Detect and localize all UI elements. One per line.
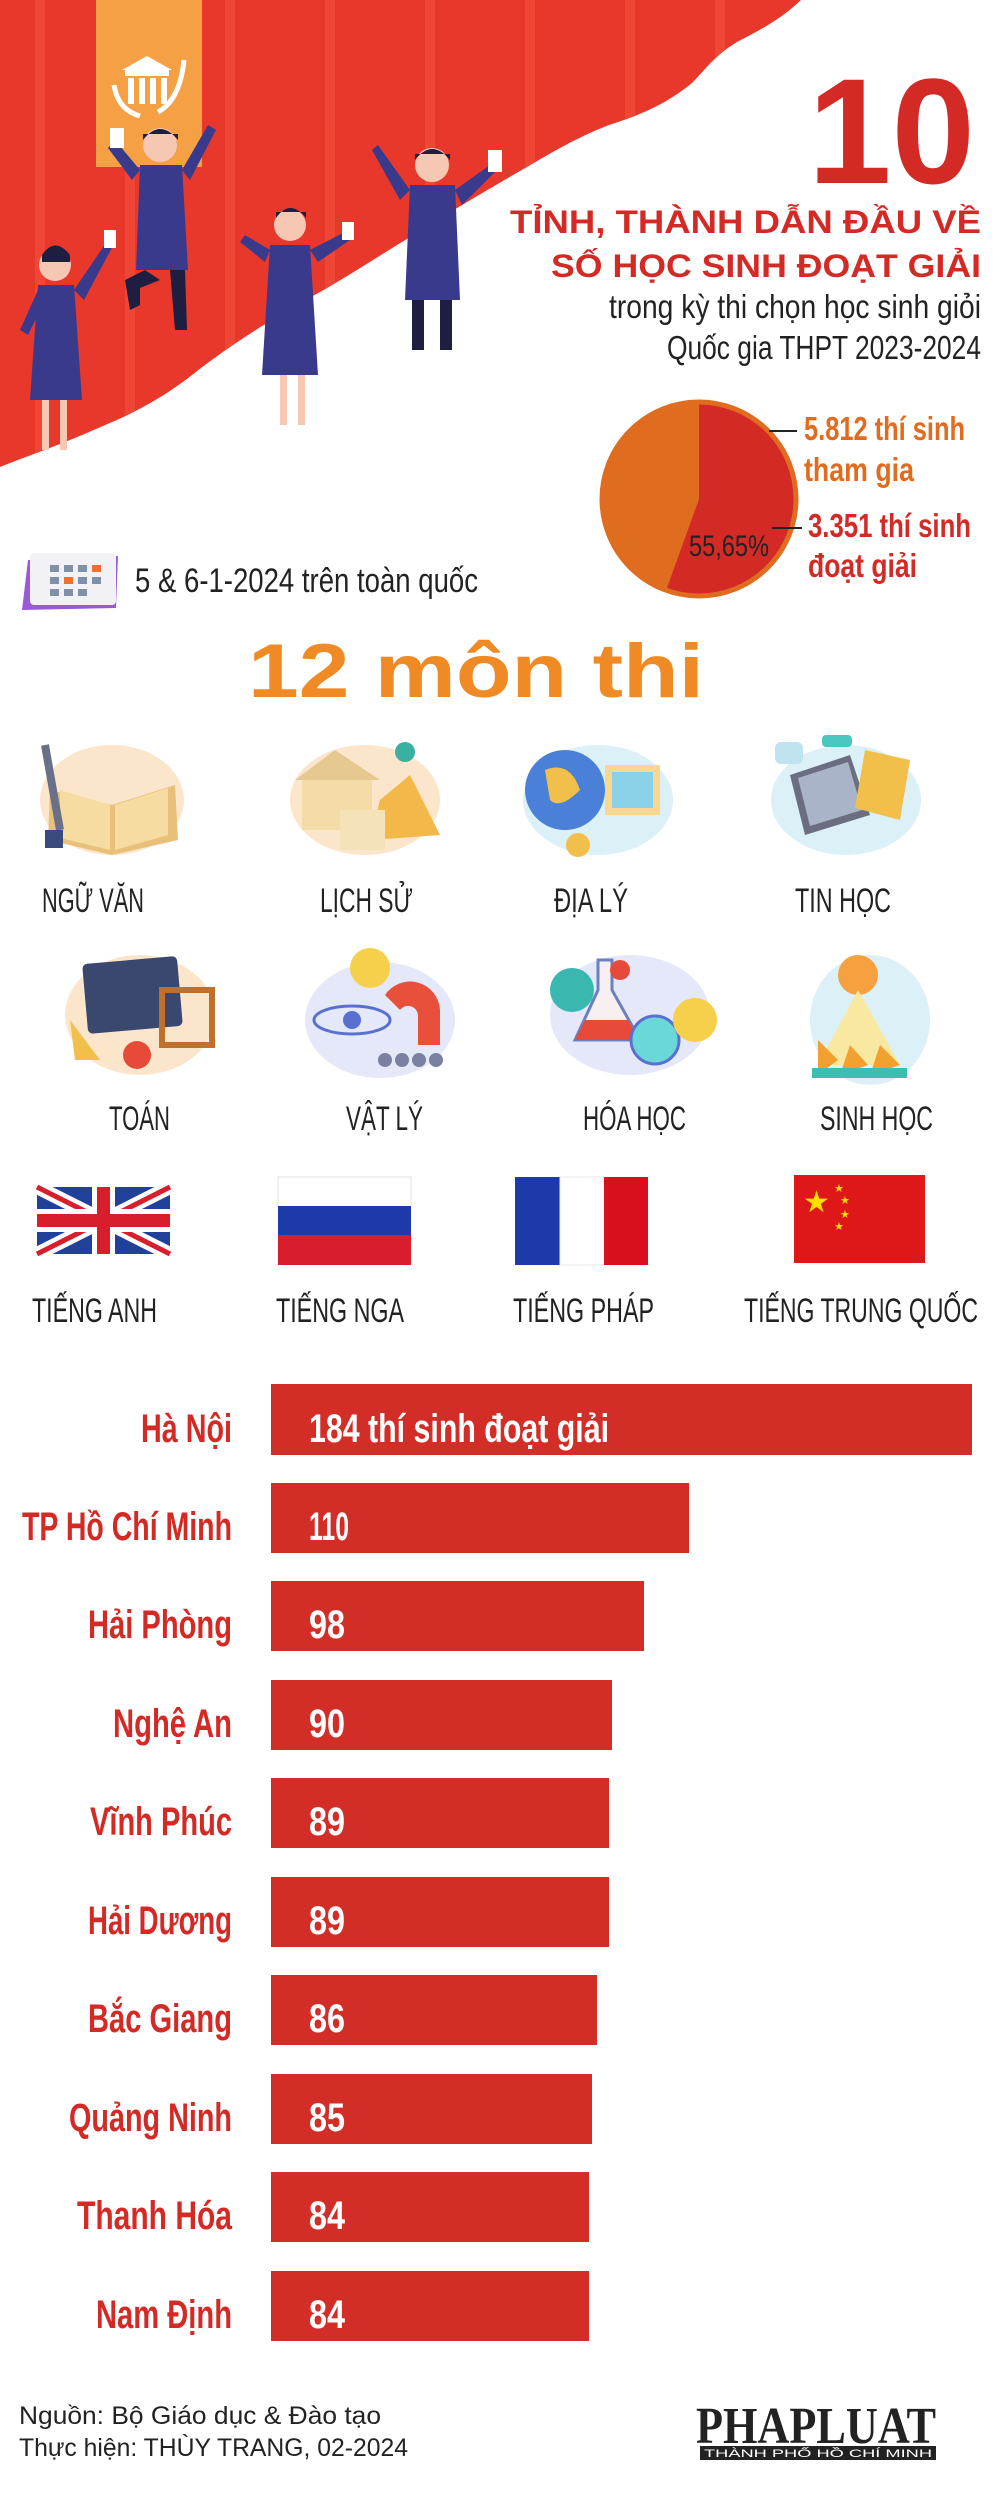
bar: Thanh Hóa <box>77 2172 589 2242</box>
subject labels row 1: ĐỊA LÝ <box>554 882 628 920</box>
logo: Pháp Luật: THÀNH PHỐ HỒ CHÍ MINH <box>704 2446 932 2460</box>
bar: Hải Phòng <box>88 1581 644 1651</box>
icon: geography <box>523 745 673 857</box>
source credits <box>19 2402 408 2462</box>
bar: Nghệ An: Nghệ An <box>113 1702 232 1746</box>
title: SỐ HỌC SINH ĐOẠT GIẢI <box>551 248 981 284</box>
bar: TP Hồ Chí Minh: 110 <box>309 1505 349 1549</box>
subject labels row 2: SINH HỌC <box>820 1100 933 1138</box>
bar: Quảng Ninh: 85 <box>309 2096 345 2140</box>
logo: Pháp Luật: PHAPLUAT <box>696 2398 936 2455</box>
subtitle <box>609 288 981 366</box>
subject labels row 3: TIẾNG PHÁP <box>513 1292 654 1330</box>
bar: Hải Phòng: 98 <box>309 1603 345 1647</box>
icon: China flag: ★ <box>803 1185 830 1220</box>
source credits: Thực hiện: THÙY TRANG, 02-2024 <box>19 2433 408 2462</box>
icon: China flag <box>794 1175 925 1263</box>
subject icons row 2 <box>65 948 930 1085</box>
subject labels row 3: TIẾNG NGA <box>276 1292 404 1330</box>
bar: Vĩnh Phúc: Vĩnh Phúc <box>90 1800 232 1844</box>
icon: computer <box>771 735 921 855</box>
bar: Hải Dương: Hải Dương <box>88 1899 232 1943</box>
bar: Hải Dương: 89 <box>309 1899 345 1943</box>
title: TỈNH, THÀNH DẪN ĐẦU VỀ <box>510 204 981 240</box>
icon: China flag: ★ <box>834 1182 844 1195</box>
bar: Hà Nội: 184 thí sinh đoạt giải <box>309 1407 609 1451</box>
subject labels row 1 <box>42 882 891 920</box>
bar: Hải Dương <box>88 1877 609 1947</box>
big number 10: 10 <box>808 47 975 215</box>
icon: history <box>290 742 440 855</box>
pie labels: tham gia <box>804 451 915 488</box>
bar: Hà Nội <box>141 1384 972 1455</box>
icon: biology <box>810 955 930 1085</box>
subject icons row 1 <box>40 735 921 857</box>
flags row <box>37 1175 925 1265</box>
girl left <box>20 230 116 450</box>
icon: China flag: ★ <box>840 1194 850 1207</box>
subject labels row 1: NGỮ VĂN <box>42 882 144 920</box>
bar: Nghệ An: 90 <box>309 1702 345 1746</box>
icon: China flag: ★ <box>840 1208 850 1221</box>
heading: 12 môn thi: 12 môn thi <box>248 629 704 714</box>
icon: UK flag <box>37 1187 170 1254</box>
icon: book <box>40 745 184 855</box>
bar: Bắc Giang <box>88 1975 597 2045</box>
subject labels row 1: TIN HỌC <box>795 882 891 920</box>
bar: Quảng Ninh: Quảng Ninh <box>69 2096 232 2140</box>
subject labels row 3: TIẾNG ANH <box>32 1292 157 1330</box>
bar: TP Hồ Chí Minh: TP Hồ Chí Minh <box>22 1505 232 1549</box>
bar: Bắc Giang: Bắc Giang <box>88 1995 232 2041</box>
bar: Thanh Hóa: 84 <box>309 2194 346 2238</box>
icon: calendar <box>22 553 118 610</box>
icon: Russia flag <box>278 1177 411 1265</box>
bar: Vĩnh Phúc: 89 <box>309 1800 345 1844</box>
bar chart: provinces <box>22 1384 972 2341</box>
exam date: 5 & 6-1-2024 trên toàn quốc <box>135 562 478 600</box>
subject labels row 2: TOÁN <box>109 1100 170 1138</box>
icon: physics <box>305 948 455 1078</box>
pie labels: đoạt giải <box>808 547 917 584</box>
bar: TP Hồ Chí Minh <box>22 1483 689 1553</box>
students illustration <box>20 125 502 450</box>
subject labels row 3 <box>32 1291 978 1330</box>
curtain background <box>0 0 801 500</box>
title <box>510 204 981 284</box>
icon: math <box>65 955 215 1075</box>
bar: Thanh Hóa: Thanh Hóa <box>77 2194 233 2238</box>
bar: Bắc Giang: 86 <box>309 1997 345 2041</box>
banner: orange with logo <box>96 0 202 167</box>
bar: Quảng Ninh <box>69 2074 592 2144</box>
pie chart: 55,65% <box>689 530 769 563</box>
icon: France flag <box>515 1177 648 1265</box>
bar: Nghệ An <box>113 1680 612 1750</box>
bar: Hà Nội: Hà Nội <box>141 1407 232 1451</box>
pie chart <box>600 400 802 598</box>
subject labels row 2 <box>109 1100 933 1138</box>
subject labels row 2: VẬT LÝ <box>346 1100 423 1138</box>
girl middle <box>240 208 354 425</box>
bar: Nam Định: Nam Định <box>96 2293 232 2337</box>
boy right <box>372 145 502 350</box>
icon: chemistry <box>550 955 717 1075</box>
subject labels row 2: HÓA HỌC <box>583 1100 686 1138</box>
icon: China flag: ★ <box>834 1220 844 1233</box>
subject labels row 1: LỊCH SỬ <box>320 882 413 920</box>
bar: Nam Định: 84 <box>309 2293 346 2337</box>
boy jumping <box>108 125 216 330</box>
pie labels <box>804 410 971 584</box>
source credits: Nguồn: Bộ Giáo dục & Đào tạo <box>19 2402 381 2430</box>
bar: Vĩnh Phúc <box>90 1778 609 1848</box>
bar: Hải Phòng: Hải Phòng <box>88 1603 232 1647</box>
bar: Nam Định <box>96 2271 589 2341</box>
